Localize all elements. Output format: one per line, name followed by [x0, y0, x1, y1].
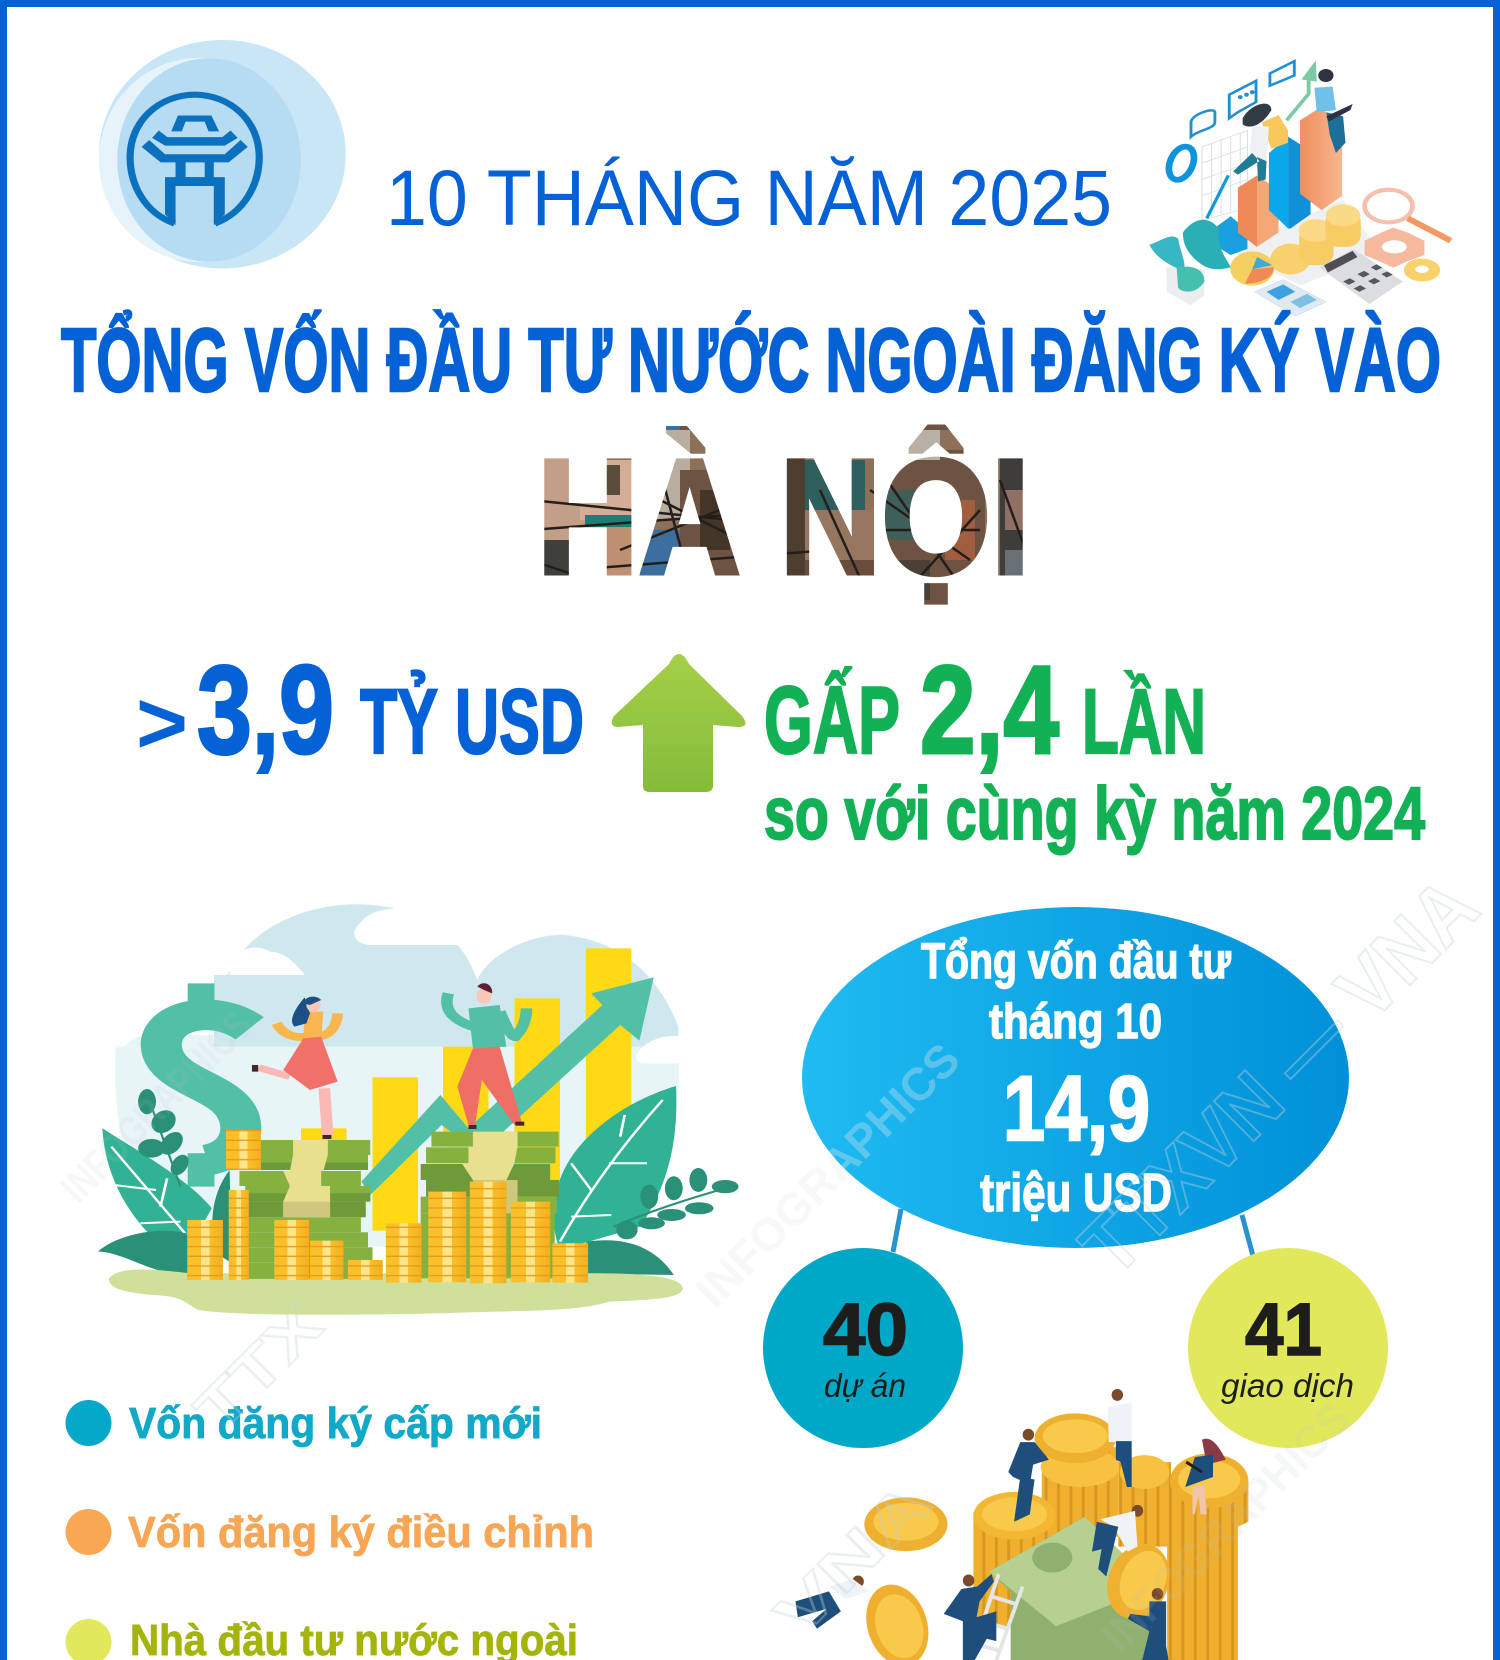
watermarks: INFOGRAPHICS: [685, 1033, 970, 1317]
branch left: [138, 1089, 192, 1187]
woman sitting: [1185, 1439, 1226, 1514]
oval text: triệu USD: [980, 1163, 1172, 1223]
gears: [1365, 228, 1424, 268]
circle: 41 transactions: [1188, 1248, 1388, 1448]
woman: [1262, 115, 1288, 149]
man figure: [447, 983, 526, 1129]
person bending: [1092, 1505, 1143, 1576]
up arrows: [1207, 175, 1228, 218]
person crawling: [795, 1576, 870, 1629]
dollar sign: [161, 983, 250, 1187]
key figure: total capital: >: [136, 673, 188, 772]
sky background: [116, 1035, 214, 1080]
paper report: [1255, 279, 1326, 316]
watermarks: INFOGRAPHICS: [51, 1001, 261, 1211]
person climbing: [944, 1574, 996, 1660]
magnifier: [1365, 190, 1412, 222]
branch right: [614, 1168, 739, 1239]
heart ring: [1164, 144, 1199, 183]
growth arrow: [361, 977, 654, 1195]
coin stacks: [187, 1130, 588, 1283]
icon: isometric business charts: [1149, 60, 1451, 316]
circle: 40 projects: 40: [823, 1288, 908, 1371]
woman figure: [252, 997, 338, 1139]
shadow floor: [1228, 200, 1381, 286]
chat icons: [1191, 61, 1294, 137]
circle: 41 transactions: 41: [1245, 1288, 1322, 1371]
calculator: [1319, 249, 1403, 304]
legend: adjusted capital: Vốn đăng ký điều chỉnh: [128, 1508, 594, 1557]
gold column C: [1118, 1462, 1171, 1547]
gold column A: [973, 1512, 1055, 1626]
illustration: money stacks and growth chart: [98, 904, 739, 1315]
plant and pot: [1166, 267, 1204, 305]
pie chart: [1230, 251, 1274, 286]
oval text: 14,9: [1003, 1058, 1150, 1160]
watermarks: [51, 861, 1495, 1660]
carried coin left: [856, 1575, 939, 1660]
person carrying coin: [1128, 1588, 1169, 1660]
key figure: total capital: TỶ USD: [360, 669, 584, 773]
yellow bars: [372, 948, 631, 1231]
logo: Hanoi emblem on pale blue circles: [99, 40, 346, 268]
key figure: total capital: 3,9: [197, 641, 334, 780]
illustration: business people and gold coins: [795, 1389, 1248, 1660]
man: [1314, 86, 1336, 112]
watermarks: INFOGRAPHICS: [1090, 1392, 1360, 1660]
legend: newly registered capital: Vốn đăng ký cấp mới: [129, 1399, 542, 1448]
blue cube: [1214, 216, 1247, 255]
period heading: 10 THÁNG NĂM 2025: [386, 153, 1112, 242]
oval text: tháng 10: [989, 995, 1162, 1049]
left cash stack: [239, 1140, 372, 1279]
person suit left: [1008, 1429, 1049, 1522]
carried coin right: [1096, 1533, 1181, 1630]
key figure: growth multiple: GẤP: [764, 666, 900, 774]
bars: [1238, 175, 1257, 247]
leaves right: [554, 1086, 676, 1250]
arrow: increase: [612, 654, 745, 792]
ladder: [970, 1574, 1023, 1660]
connector lines: [893, 1209, 1253, 1256]
circle: 41 transactions: giao dịch: [1221, 1367, 1354, 1404]
key figure: growth multiple: [764, 641, 1425, 855]
oval text: Tổng vốn đầu tư: [921, 933, 1232, 989]
oval: total capital in October: [802, 907, 1349, 1248]
circle: 40 projects: dự án: [824, 1367, 906, 1404]
woman's coin on stack: [301, 1128, 347, 1140]
key figure: growth multiple: LẦN: [1082, 670, 1206, 773]
clouds: [230, 947, 305, 975]
gold column B: [1042, 1447, 1118, 1537]
key figure: total capital: [136, 641, 584, 780]
leaves left: [102, 1128, 212, 1247]
watermarks: INFOGRAPHICS: [685, 1033, 970, 1317]
key figure: growth multiple: 2,4: [920, 641, 1059, 780]
gold column D: [1167, 1522, 1238, 1660]
watermarks: TTX: [182, 1291, 335, 1444]
watermarks: VNA: [762, 1467, 944, 1649]
coins: [1270, 244, 1311, 275]
floating coin: [864, 1497, 948, 1551]
oval text: [921, 933, 1232, 1223]
person standing top: [1108, 1389, 1132, 1487]
banknote pile: [989, 1517, 1157, 1660]
city name filled with street photo texture: HÀ NỘI: [537, 425, 1030, 608]
ground: [109, 1269, 683, 1315]
circle: 40 projects: [763, 1248, 963, 1448]
top of column D: [1167, 1481, 1248, 1527]
grid chart: [1202, 131, 1247, 220]
right cash stack: [421, 1132, 559, 1278]
